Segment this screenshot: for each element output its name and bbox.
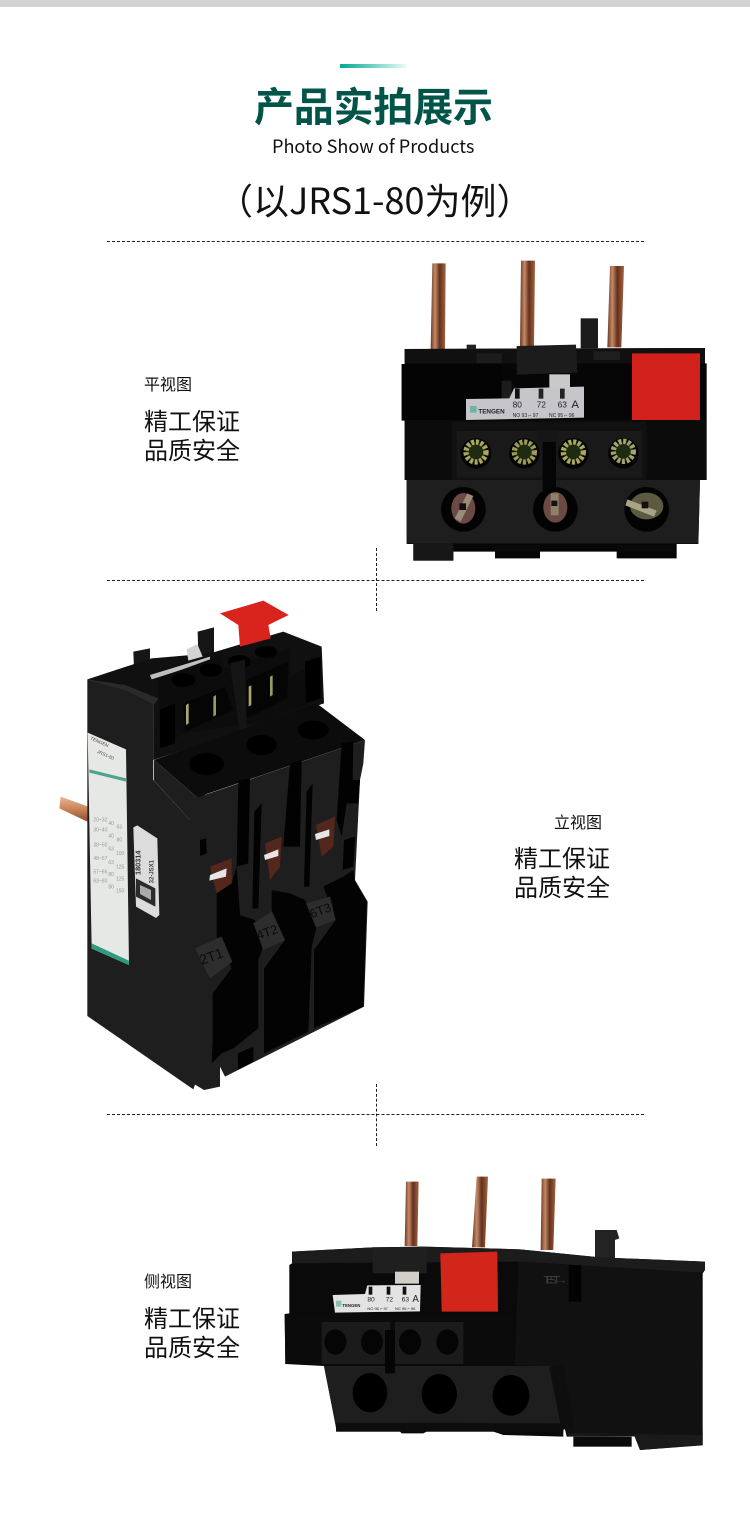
side label: 38~50	[93, 843, 108, 849]
nameplate: NC 95 ⌐ 96	[395, 1306, 416, 1311]
nameplate: NO 95 ⌐ 97	[367, 1306, 389, 1311]
side label: 125	[116, 864, 125, 870]
slogan: upright view	[514, 839, 610, 903]
nameplate: A	[412, 1294, 419, 1305]
nameplate	[333, 1285, 421, 1313]
side label: 63~80	[93, 879, 108, 885]
product photo: upright view relay	[59, 600, 368, 1090]
product photo: side view relay	[284, 1176, 705, 1450]
nameplate: NO 93 ⌐ 97	[513, 413, 539, 419]
side label: 40	[108, 833, 114, 839]
barcode sticker: 180314	[134, 850, 143, 875]
side label: 63	[108, 860, 114, 866]
barcode sticker: 32-JSX1	[149, 859, 155, 883]
tabs	[133, 627, 214, 678]
caption: front view: 平视图	[144, 371, 192, 395]
white slider	[187, 644, 203, 661]
lower recesses	[212, 867, 367, 1063]
nameplate: 80	[367, 1296, 375, 1303]
nameplate: 63	[402, 1296, 409, 1303]
side label: 100	[116, 851, 125, 857]
slogan: front view: 精工保证	[144, 402, 240, 437]
red test button	[440, 1252, 498, 1312]
nameplate: TENGEN	[342, 1303, 360, 1308]
copper pin	[59, 797, 88, 822]
model note: （以JRS1-80为例）	[217, 173, 532, 225]
side label: 48~57	[93, 856, 108, 862]
front face	[190, 740, 368, 1090]
caption: upright view: 立视图	[554, 809, 602, 833]
side label: JRS1-80	[96, 749, 115, 761]
nameplate: A	[571, 399, 579, 411]
front face: 2T1	[197, 944, 226, 968]
slogan: side view	[144, 1299, 240, 1363]
copper contacts	[209, 817, 335, 893]
slogan: front view	[144, 402, 240, 466]
main terminal holes	[353, 1373, 529, 1416]
nameplate: NC 95 ⌐ 96	[549, 413, 575, 419]
shoulder face	[154, 760, 198, 827]
front face: 6T3	[308, 901, 333, 921]
silver stripe	[150, 657, 210, 679]
side label: 80	[117, 838, 122, 844]
top rear surface	[87, 632, 324, 760]
side label: TENGEN	[90, 736, 109, 748]
product photo: front view relay	[402, 260, 707, 561]
TEST mark: TEST→	[543, 1274, 567, 1286]
slogan: upright view: 精工保证	[514, 839, 610, 874]
side label: 150	[116, 889, 125, 895]
relay body	[285, 1247, 705, 1450]
front face: 4T2	[255, 922, 280, 943]
auxiliary screws	[461, 430, 639, 490]
copper pins	[405, 1177, 556, 1250]
side label: 30~40	[93, 828, 108, 834]
red test button	[220, 601, 289, 647]
side label: 80	[108, 872, 114, 878]
slots	[200, 742, 360, 1069]
copper pins	[431, 261, 624, 349]
side label: 63	[117, 824, 122, 830]
text block: upright view	[514, 809, 610, 903]
white slider	[395, 1272, 419, 1284]
slogan: side view: 品质安全	[144, 1328, 240, 1363]
side label: 80	[108, 884, 114, 890]
nameplate: TENGEN	[478, 408, 505, 415]
nameplate: 72	[386, 1296, 393, 1303]
phase tabs	[195, 897, 336, 978]
top grey bar	[0, 0, 750, 7]
text block: front view	[144, 371, 240, 466]
header accent line	[340, 64, 406, 68]
white slider	[549, 374, 570, 388]
title: 产品实拍展示	[254, 75, 493, 133]
barcode sticker	[133, 825, 159, 918]
red test button	[632, 353, 700, 420]
relay body	[402, 345, 707, 561]
slogan: front view: 品质安全	[144, 431, 240, 466]
main terminal holes	[441, 487, 669, 532]
test tab	[595, 1230, 619, 1258]
side label	[88, 733, 129, 965]
left side face	[87, 679, 197, 1089]
text block: side view	[144, 1268, 240, 1363]
subtitle english: Photo Show of Products	[272, 133, 474, 159]
top shoulder	[87, 679, 158, 705]
caption: side view: 侧视图	[144, 1268, 192, 1292]
test tab	[581, 318, 598, 348]
main terminal top	[154, 703, 365, 798]
side label: 125	[116, 877, 125, 883]
nameplate: 80	[513, 399, 522, 409]
nameplate: 63	[558, 399, 567, 409]
nameplate: 72	[537, 399, 546, 409]
slogan: upright view: 品质安全	[514, 868, 610, 903]
auxiliary terminal block	[322, 1322, 463, 1373]
auxiliary terminal block	[158, 646, 321, 748]
nameplate	[466, 387, 584, 420]
side label: 63	[108, 847, 114, 853]
slogan: side view: 精工保证	[144, 1299, 240, 1334]
side label: 40	[108, 821, 114, 827]
side label: 20~32	[93, 818, 108, 824]
side label: 57~66	[93, 869, 108, 875]
